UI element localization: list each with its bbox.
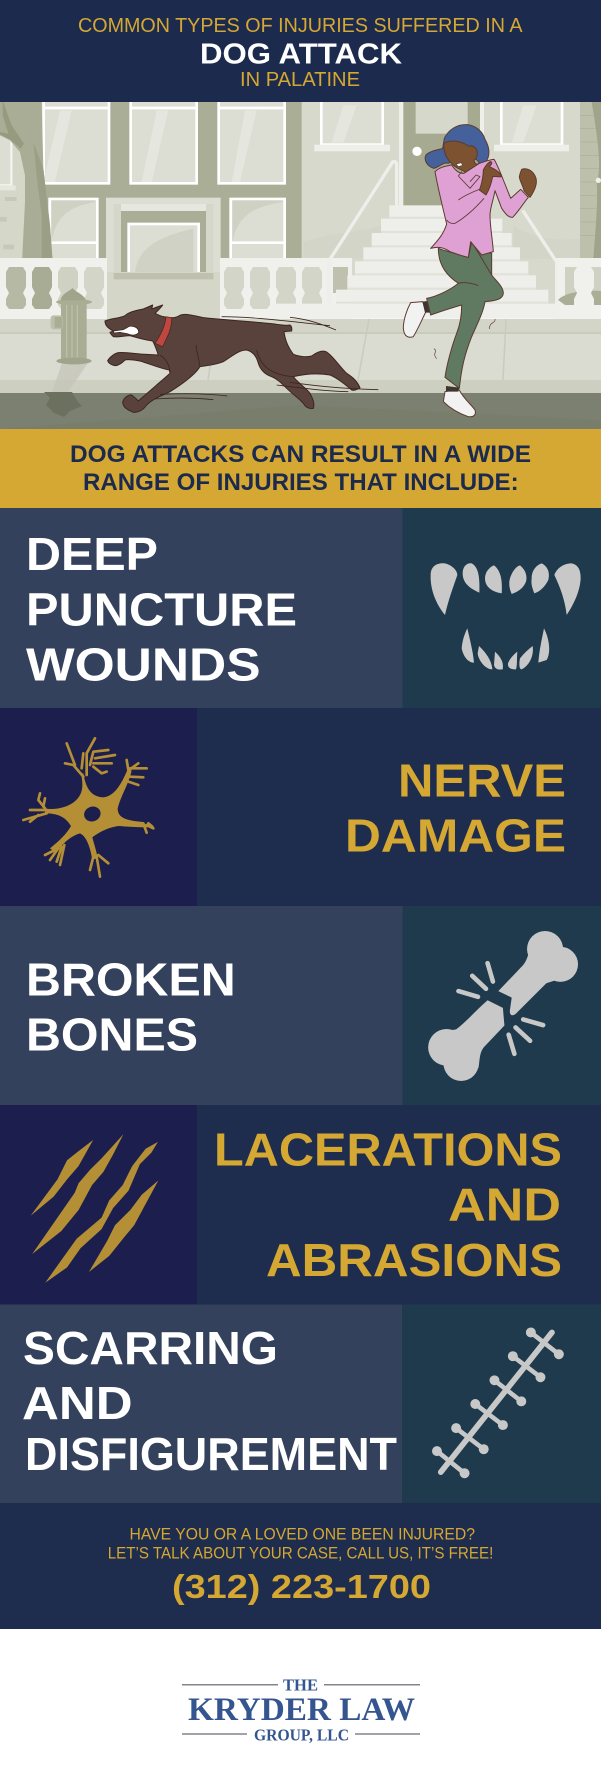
lower windows (50, 199, 285, 262)
call to action line 1: HAVE YOU OR A LOVED ONE BEEN INJURED? (130, 1524, 475, 1543)
header line 3: IN PALATINE (240, 69, 360, 91)
logo: the kryder law group (182, 1676, 420, 1745)
raised fist (519, 169, 536, 197)
heading: lacerations and abrasions: AND (448, 1179, 561, 1231)
centre lintel and window (106, 198, 221, 274)
trembling marks (434, 319, 495, 359)
heading: broken bones: BONES (26, 1008, 198, 1060)
face (443, 140, 480, 172)
phone number: (312) 223-1700 (172, 1568, 431, 1605)
dog (105, 305, 378, 412)
icon: fangs (431, 563, 581, 670)
subheading line 1: DOG ATTACKS CAN RESULT IN A WIDE (70, 441, 531, 468)
tree (0, 102, 53, 262)
right shoe (443, 390, 475, 417)
header line 1: COMMON TYPES OF INJURIES SUFFERED IN A (78, 15, 523, 37)
heading: broken bones: BROKEN (26, 954, 236, 1006)
heading: deep puncture wounds: PUNCTURE (26, 584, 297, 636)
windows right (321, 100, 383, 145)
heading: scarring and disfigurement: AND (22, 1377, 133, 1429)
heading: scarring and disfigurement: SCARRING (23, 1322, 278, 1374)
building left wall (0, 100, 302, 322)
illustration: street scene (0, 100, 601, 429)
subheading line 2: RANGE OF INJURIES THAT INCLUDE: (83, 469, 519, 496)
right balustrade (555, 258, 601, 267)
heading: nerve damage (345, 755, 566, 862)
heading: scarring and disfigurement (22, 1322, 397, 1480)
heading: nerve damage: NERVE (398, 755, 566, 807)
hydrant shadow (44, 363, 88, 417)
stairs and handrails (273, 162, 560, 319)
pants (427, 242, 503, 388)
balustrades and balusters (0, 258, 601, 319)
icon: claw marks (31, 1134, 158, 1283)
teeth (113, 326, 139, 335)
call to action line 2: LET’S TALK ABOUT YOUR CASE, CALL US, IT’S FREE! (108, 1543, 493, 1562)
header banner (0, 0, 601, 102)
heading: nerve damage: DAMAGE (345, 810, 566, 862)
header title: DOG ATTACK (200, 38, 402, 70)
heading: lacerations and abrasions (214, 1124, 562, 1286)
panel: scarring and disfigurement (0, 1304, 601, 1503)
panel: nerve damage (0, 708, 601, 906)
icon: fire hydrant (51, 288, 92, 364)
upper windows (44, 100, 285, 183)
heading: scarring and disfigurement: DISFIGUREMENT (25, 1428, 397, 1480)
woman (403, 125, 536, 417)
socks (422, 301, 459, 392)
shirt (431, 159, 528, 257)
panel: lacerations and abrasions (0, 1105, 601, 1304)
icon: stitches (432, 1327, 564, 1478)
base under centre window (107, 272, 221, 322)
panel: broken bones (0, 906, 601, 1105)
heading: lacerations and abrasions: LACERATIONS (214, 1124, 562, 1176)
icon: neuron (23, 738, 153, 877)
hand crossing chest (479, 162, 502, 195)
panel: deep puncture wounds (0, 508, 601, 708)
heading: broken bones (26, 954, 236, 1060)
gold subheading band (0, 429, 601, 508)
logo word: group llc: GROUP, LLC (254, 1726, 349, 1745)
heading: lacerations and abrasions: ABRASIONS (266, 1234, 562, 1286)
collar (155, 317, 172, 347)
logo word: kryder law: KRYDER LAW (188, 1692, 415, 1728)
footer call to action (0, 1503, 601, 1629)
logo word: the: THE (283, 1676, 318, 1695)
building right wall (300, 100, 601, 315)
icon: broken bone (428, 931, 578, 1081)
sidewalk (0, 319, 601, 429)
heading: deep puncture wounds (26, 528, 297, 691)
heading: deep puncture wounds: WOUNDS (26, 639, 261, 691)
door (399, 102, 484, 206)
motion lines upper (222, 317, 336, 330)
hair (425, 125, 489, 168)
left shoe (403, 302, 426, 337)
heading: deep puncture wounds: DEEP (26, 528, 158, 580)
motion lines lower (154, 382, 378, 400)
